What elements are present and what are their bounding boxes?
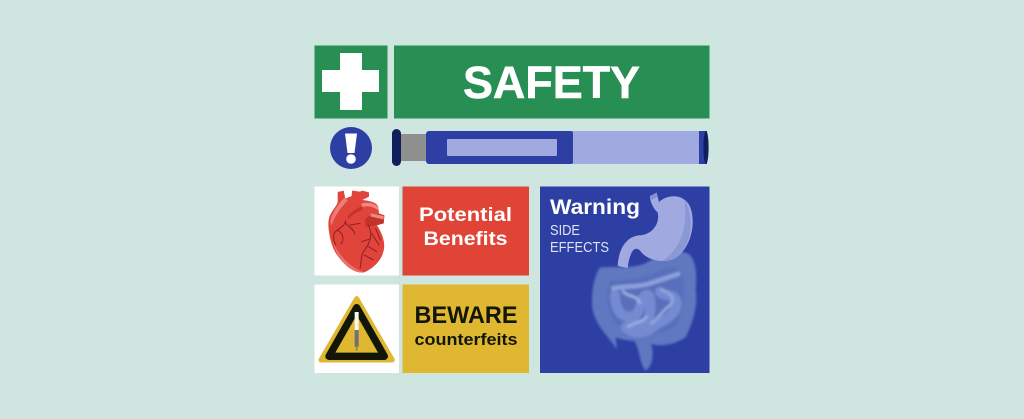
text: SIDE EFFECTS: SIDE: [550, 223, 580, 239]
panel: first aid cross: [314, 46, 388, 118]
text: SIDE EFFECTS: EFFECTS: [550, 240, 609, 256]
heading: SAFETY: SAFETY: [463, 57, 640, 108]
text: Warning: Warning: [550, 195, 640, 219]
panel: warning triangle: [314, 284, 399, 373]
icon: exclamation mark: [330, 127, 372, 169]
panel: warning side effects: [540, 186, 710, 373]
panel: potential benefits: [402, 186, 529, 276]
stomach: [618, 193, 693, 268]
panel: safety heading: [394, 46, 710, 118]
text: counterfeits: counterfeits: [414, 330, 518, 349]
text: Potential Benefits: Benefits: [424, 228, 508, 250]
icon: anatomical heart: [328, 191, 384, 273]
text: BEWARE: BEWARE: [414, 302, 518, 329]
panel: beware counterfeits: [402, 284, 529, 373]
small intestine: [613, 274, 678, 332]
icon: white cross: [322, 53, 379, 110]
icon: injection pen: [392, 129, 709, 166]
icon: digestive system: [592, 193, 696, 371]
icon: warning sign with pen: [321, 299, 392, 360]
large intestine: [592, 252, 696, 371]
panel: heart: [314, 186, 399, 276]
text: Potential Benefits: Potential: [419, 204, 512, 226]
